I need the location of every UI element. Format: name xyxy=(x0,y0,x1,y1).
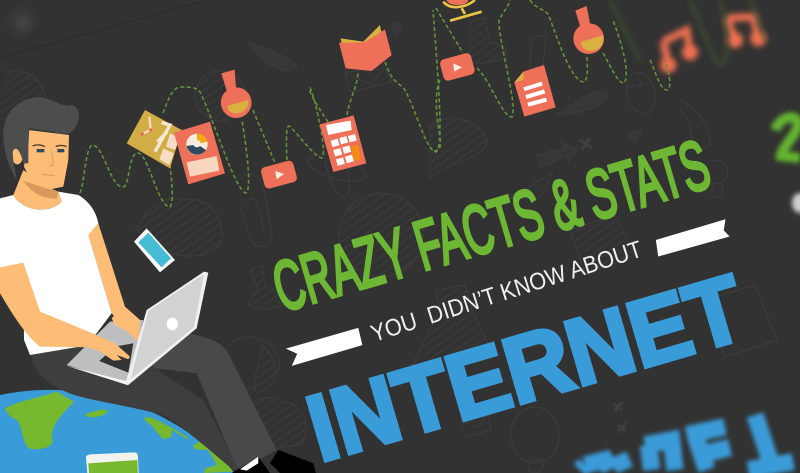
face xyxy=(24,130,69,189)
icon: text document xyxy=(514,65,556,117)
paper plane xyxy=(510,173,552,198)
laptop logo xyxy=(167,318,178,330)
flask top xyxy=(468,18,507,63)
cloud right xyxy=(430,118,487,178)
far leg xyxy=(140,333,277,472)
blurred background wave xyxy=(610,0,765,64)
laptop screen xyxy=(126,272,208,385)
blurred blue lettering xyxy=(580,415,793,470)
icon: calculator xyxy=(320,115,366,172)
mouse xyxy=(622,69,660,117)
ruler xyxy=(530,35,546,68)
near arm and hand xyxy=(0,263,130,361)
far arm xyxy=(88,223,140,342)
brush xyxy=(557,92,607,115)
globe xyxy=(0,390,234,473)
hair xyxy=(3,97,79,180)
icon: chart map xyxy=(127,110,182,168)
mouse shape lower xyxy=(230,337,280,392)
eyes and mouth xyxy=(33,145,67,176)
apple xyxy=(339,193,423,277)
subtitle: YOU DIDN’T KNOW ABOUT xyxy=(368,236,646,348)
laptop base xyxy=(67,320,143,384)
tablet on globe xyxy=(86,452,139,473)
far hand xyxy=(112,307,140,342)
cloud lower xyxy=(243,397,306,450)
near leg xyxy=(32,323,239,470)
crosses xyxy=(580,138,626,433)
envelope xyxy=(345,68,392,92)
paperclip xyxy=(240,174,272,247)
icon: flask one xyxy=(221,70,252,118)
icon: flask two xyxy=(573,6,604,54)
icon: video player two xyxy=(439,52,476,82)
icon: globe stand xyxy=(443,0,482,21)
arrow xyxy=(537,143,577,167)
bubble circle xyxy=(195,71,245,121)
pencil xyxy=(248,43,297,71)
large flask centre xyxy=(412,285,494,365)
man working on laptop xyxy=(0,97,316,473)
atom xyxy=(305,150,369,186)
blurred green number xyxy=(775,117,800,158)
neck xyxy=(13,170,62,210)
icon: report document xyxy=(174,122,225,184)
hatched bar xyxy=(570,215,635,275)
blurred white shape xyxy=(792,193,800,213)
blurred background music notes xyxy=(660,17,766,73)
small flask xyxy=(248,265,292,309)
cloud left xyxy=(135,198,222,256)
phone doodle xyxy=(680,100,710,150)
continents xyxy=(5,392,233,473)
ear xyxy=(12,146,23,164)
notepad xyxy=(705,285,777,357)
ribbons xyxy=(286,219,730,366)
shoes xyxy=(232,450,316,473)
icon: video player one xyxy=(260,160,298,190)
t-shirt xyxy=(0,192,112,355)
bulb lower xyxy=(511,407,559,463)
envelope lower xyxy=(460,412,491,437)
icon: smartphone xyxy=(134,228,175,272)
blurred corner glow xyxy=(0,0,45,45)
hearts xyxy=(391,22,642,145)
dashed connector line xyxy=(80,0,670,207)
bulb top right xyxy=(704,160,728,184)
icon: open book xyxy=(339,25,392,71)
